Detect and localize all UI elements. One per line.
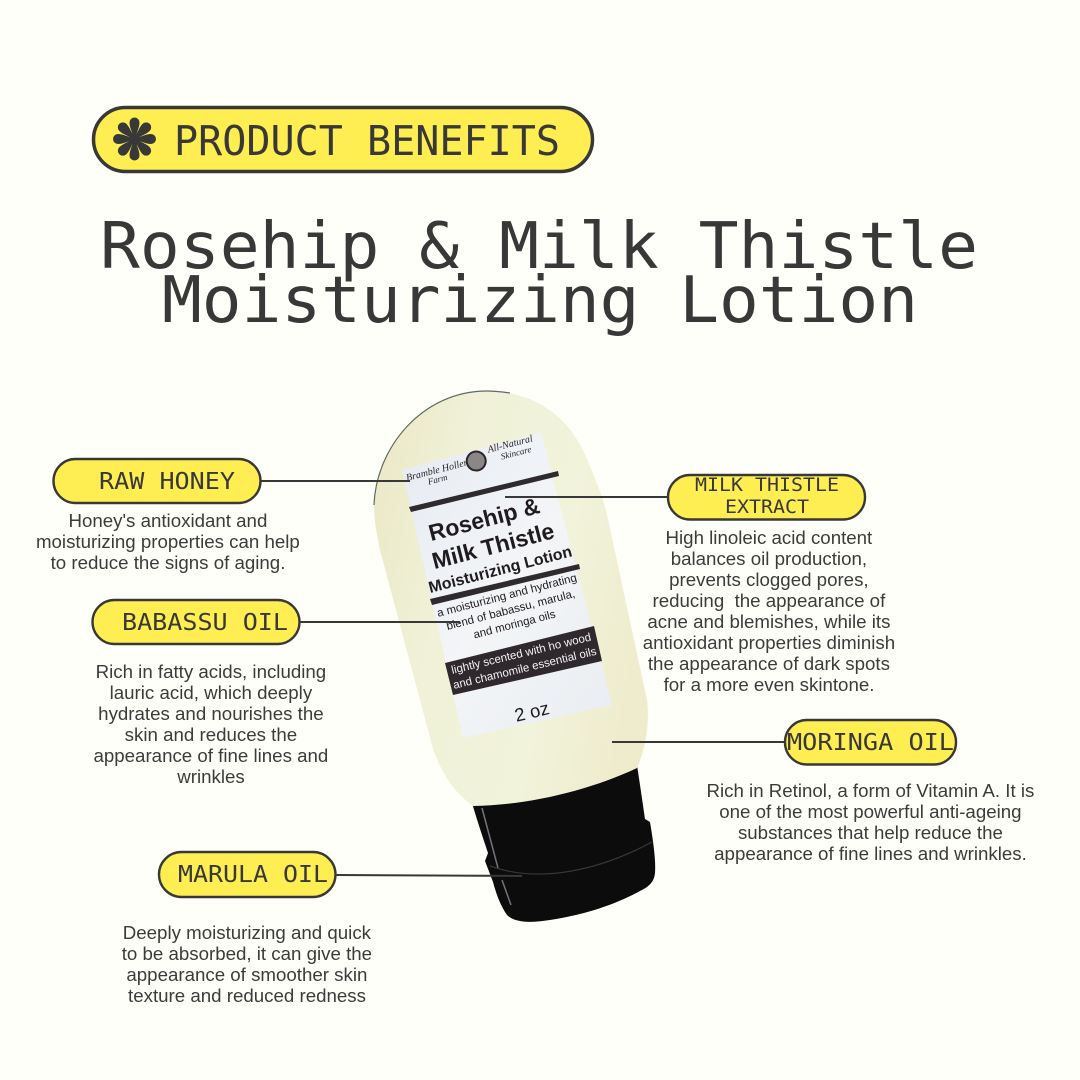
moringa oil text: substances that help reduce the xyxy=(738,822,1003,843)
badge label: PRODUCT BENEFITS xyxy=(174,117,560,165)
label heading xyxy=(412,487,574,597)
label description: a moisturizing and hydrating xyxy=(436,572,578,620)
moringa oil text: Rich in Retinol, a form of Vitamin A. It is xyxy=(706,780,1034,801)
marula oil text: Deeply moisturizing and quick xyxy=(123,922,372,943)
cap seam highlight xyxy=(490,842,652,874)
raw honey text: to reduce the signs of aging. xyxy=(51,552,285,573)
moringa oil text: appearance of fine lines and wrinkles. xyxy=(714,843,1027,864)
label description xyxy=(436,572,586,649)
lower rule xyxy=(430,564,580,605)
label heading: Milk Thistle xyxy=(429,517,557,574)
bottle cap xyxy=(472,765,655,922)
moringa oil text: one of the most powerful anti-ageing xyxy=(719,801,1022,822)
milk thistle text: balances oil production, xyxy=(671,548,867,569)
icon: flower asterisk xyxy=(113,118,156,160)
milk thistle text: for a more even skintone. xyxy=(664,674,874,695)
label description: and moringa oils xyxy=(472,609,557,641)
scent text: lightly scented with ho wood xyxy=(450,632,592,677)
callout: marula oil: MARULA OIL xyxy=(178,862,328,888)
marula oil text: to be absorbed, it can give the xyxy=(122,943,372,964)
label heading: Moisturizing Lotion xyxy=(427,543,574,597)
raw honey text: Honey's antioxidant and xyxy=(68,510,267,531)
brand line: Farm xyxy=(426,472,449,487)
milk thistle text: antioxidant properties diminish xyxy=(643,632,895,653)
callout: milk thistle extract xyxy=(505,474,900,695)
size: 2 oz xyxy=(512,697,551,726)
label heading: Rosehip & xyxy=(426,492,542,546)
brand line: Skincare xyxy=(500,444,532,462)
title: Moisturizing Lotion xyxy=(162,264,918,338)
callout: babassu oil: BABASSU OIL xyxy=(122,610,288,636)
milk thistle text: the appearance of dark spots xyxy=(648,653,890,674)
callout: babassu oil xyxy=(92,600,460,787)
scent text: and chamomile essential oils xyxy=(452,646,598,692)
bottle body xyxy=(374,391,648,806)
babassu oil text: lauric acid, which deeply xyxy=(110,682,313,703)
cap gloss xyxy=(482,808,511,905)
milk thistle text: prevents clogged pores, xyxy=(669,569,869,590)
brand line: Bramble Holler xyxy=(405,457,469,484)
scent band xyxy=(445,626,602,695)
babassu oil text: wrinkles xyxy=(176,766,245,787)
marula oil text: texture and reduced redness xyxy=(128,985,366,1006)
callout: milk thistle extract: MILK THISTLE xyxy=(695,474,839,496)
title: Rosehip & Milk Thistle xyxy=(100,210,978,284)
title xyxy=(100,210,978,338)
marula oil text: appearance of smoother skin xyxy=(126,964,367,985)
babassu oil text: skin and reduces the xyxy=(125,724,297,745)
product label xyxy=(402,432,612,738)
callout: raw honey: RAW HONEY xyxy=(99,469,235,495)
raw honey text: moisturizing properties can help xyxy=(36,531,300,552)
badge: product benefits xyxy=(94,108,592,172)
babassu oil text: Rich in fatty acids, including xyxy=(96,661,326,682)
babassu oil text: appearance of fine lines and xyxy=(93,745,328,766)
callout: moringa oil: MORINGA OIL xyxy=(787,730,954,756)
label description: blend of babassu, marula, xyxy=(445,588,576,633)
brand line xyxy=(403,433,538,492)
callout: raw honey xyxy=(36,459,410,573)
milk thistle text: High linoleic acid content xyxy=(666,527,873,548)
milk thistle text: acne and blemishes, while its xyxy=(647,611,890,632)
callout: milk thistle extract: EXTRACT xyxy=(725,496,809,518)
babassu oil text: hydrates and nourishes the xyxy=(98,703,324,724)
bottle rim shading xyxy=(374,391,510,505)
callout: moringa oil xyxy=(612,720,1040,864)
callout: marula oil xyxy=(122,852,522,1006)
top rule xyxy=(409,471,559,512)
product photo: lotion bottle xyxy=(374,391,655,922)
milk thistle text: reducing the appearance of xyxy=(653,590,886,611)
brand line: All-Natural xyxy=(486,433,534,456)
